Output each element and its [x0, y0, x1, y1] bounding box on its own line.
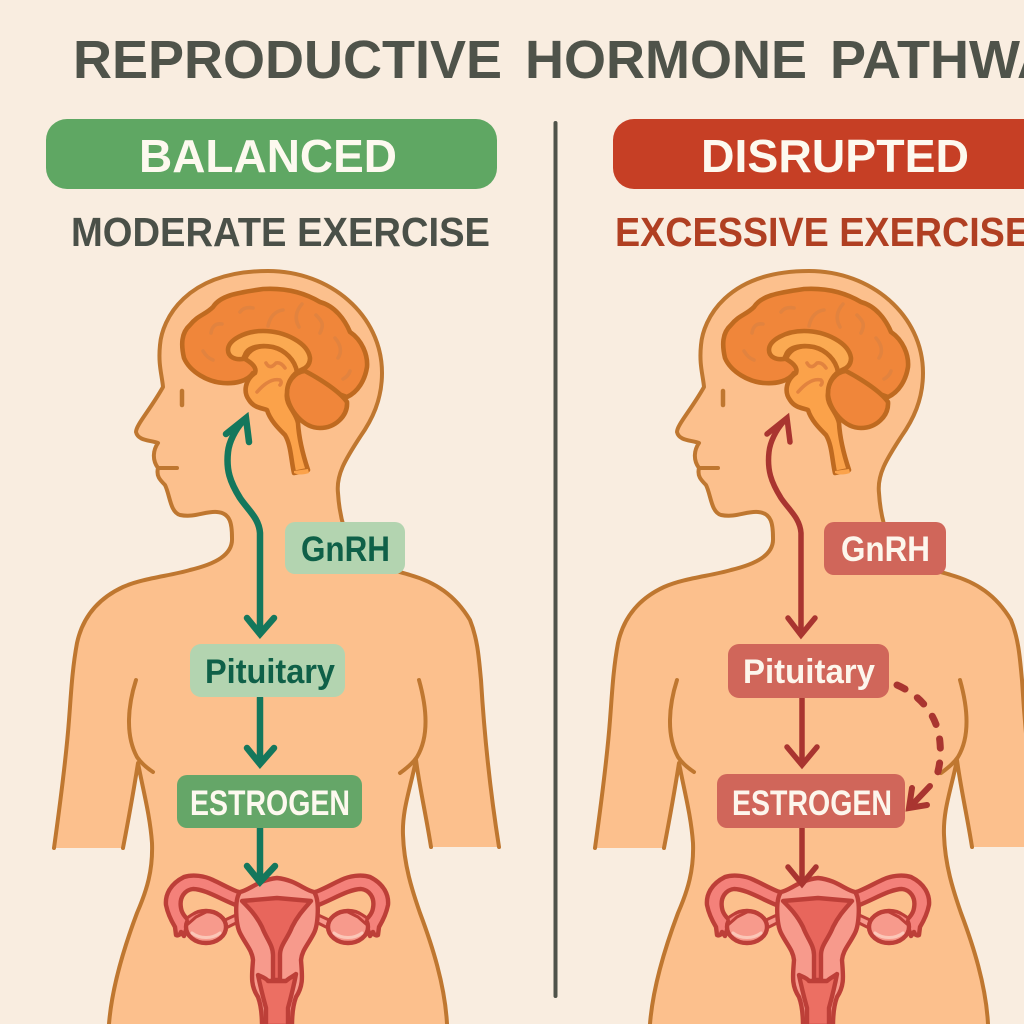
body silhouette	[54, 271, 499, 1024]
divider between panels	[554, 121, 558, 998]
icon: brain	[723, 289, 908, 474]
panel: balanced	[46, 119, 499, 1024]
label: GnRH: GnRH	[301, 530, 390, 569]
label: estrogen: ESTROGEN	[732, 784, 892, 823]
icon: brain	[182, 289, 367, 474]
balanced badge: BALANCED	[139, 130, 397, 182]
label: estrogen: ESTROGEN	[190, 784, 350, 823]
label: pituitary: Pituitary	[205, 653, 335, 691]
label: estrogen	[717, 774, 905, 828]
label: GnRH	[824, 522, 946, 575]
arrow: estrogen to uterus	[788, 828, 816, 884]
body silhouette	[595, 271, 1024, 1024]
arrow: estrogen to uterus	[247, 827, 275, 882]
arrow: dashed impaired feedback	[897, 685, 940, 808]
icon: uterus and ovaries	[166, 876, 388, 1024]
subheading: moderate exercise: MODERATE EXERCISE	[71, 209, 490, 255]
arrow: GnRH signal path up to brain and down to pituitary	[767, 418, 815, 635]
label: pituitary	[190, 644, 345, 697]
label: GnRH: GnRH	[841, 530, 930, 569]
label: estrogen	[177, 775, 362, 828]
arrow: pituitary to estrogen	[787, 698, 817, 765]
balanced badge	[46, 119, 497, 189]
title: HORMONE	[525, 30, 807, 90]
label: pituitary: Pituitary	[743, 653, 875, 691]
label: pituitary	[728, 644, 889, 698]
icon: uterus and ovaries	[707, 876, 929, 1024]
disrupted badge	[613, 119, 1024, 189]
arrow: GnRH signal path up to brain and down to pituitary	[226, 418, 274, 634]
label: GnRH	[285, 522, 405, 574]
arrow: pituitary to estrogen	[247, 698, 274, 764]
panel: disrupted	[595, 119, 1024, 1024]
title: REPRODUCTIVE	[73, 30, 502, 90]
disrupted badge: DISRUPTED	[701, 130, 969, 182]
